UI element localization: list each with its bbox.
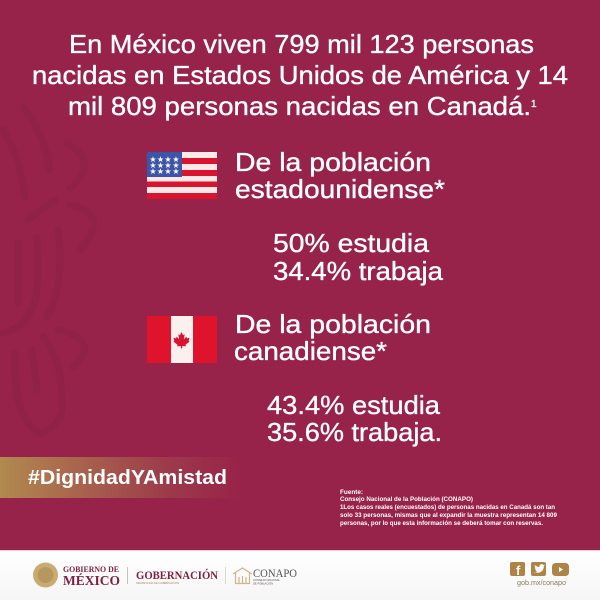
source note: Consejo Nacional de la Población (CONAPO) — [340, 497, 473, 503]
heading: mil 809 personas nacidas en Canadá. — [68, 91, 531, 121]
heading: 1 — [531, 99, 537, 110]
source note — [340, 490, 558, 527]
source note: Fuente: — [340, 490, 363, 496]
icon: United States flag: ★ — [149, 161, 157, 170]
text: US population label: De la población — [235, 147, 431, 177]
text: US statistics — [273, 228, 444, 286]
logo: Gobierno de México: GOBIERNO DE — [63, 565, 119, 574]
heading — [32, 29, 568, 121]
text: Canada statistics: 43.4% estudia — [267, 390, 441, 420]
heading: nacidas en Estados Unidos de América y 14 — [32, 60, 568, 90]
source note: solo 33 personas, mismas que al expandir la muestra representan 14 809 — [340, 513, 558, 519]
icon: United States flag: ★ — [157, 161, 164, 170]
icon: United States flag: ★ — [149, 155, 157, 164]
icon: United States flag — [147, 152, 217, 199]
text: US population label — [235, 147, 445, 204]
icon: Canada flag — [147, 316, 217, 363]
logo: CONAPO: CONSEJO NACIONAL — [253, 578, 280, 582]
social media icons: gob.mx/conapo — [517, 580, 566, 587]
heading: En México viven 799 mil 123 personas — [69, 29, 534, 59]
logo: Gobernación: SECRETARÍA DE GOBERNACIÓN — [136, 580, 179, 585]
hashtag band — [0, 457, 240, 498]
logo: Gobierno de México: MÉXICO — [63, 572, 120, 589]
social media icons: f — [516, 563, 521, 578]
source note: 1Los casos reales (encuestados) de personas nacidas en Canadá son tan — [340, 505, 555, 511]
logo: Gobernación: GOBERNACIÓN — [136, 568, 218, 582]
background watermark pattern — [0, 107, 94, 433]
icon: United States flag: ★ — [172, 155, 180, 164]
icon: United States flag: ★ — [172, 161, 180, 170]
icon: United States flag: ★ — [157, 167, 164, 176]
source note: personas, por lo que esta información se deberá tomar con reservas. — [340, 521, 543, 527]
text: US statistics: 50% estudia — [273, 228, 430, 258]
text: Canada statistics — [267, 390, 442, 447]
text: Canada population label: canadiense* — [234, 336, 387, 366]
logo: Gobierno de México — [33, 562, 120, 589]
logo: CONAPO: CONAPO — [253, 566, 297, 580]
icon: United States flag: ★ — [172, 167, 180, 176]
social media icons — [510, 562, 569, 587]
text: Canada population label: De la población — [235, 309, 431, 339]
logo: CONAPO — [233, 566, 297, 586]
text: Canada population label — [234, 309, 431, 366]
text: US statistics: 34.4% trabaja — [273, 256, 444, 286]
icon: United States flag: ★ — [164, 167, 172, 176]
logo: CONAPO: DE POBLACIÓN — [253, 580, 273, 586]
text: US population label: estadounidense* — [235, 174, 445, 204]
hashtag band: #DignidadYAmistad — [28, 467, 227, 489]
icon: United States flag: ★ — [164, 155, 172, 164]
footer bar — [0, 550, 600, 600]
text: Canada statistics: 35.6% trabaja. — [267, 417, 442, 447]
icon: United States flag: ★ — [164, 161, 172, 170]
icon: United States flag: ★ — [149, 167, 157, 176]
icon: United States flag: ★ — [157, 155, 164, 164]
